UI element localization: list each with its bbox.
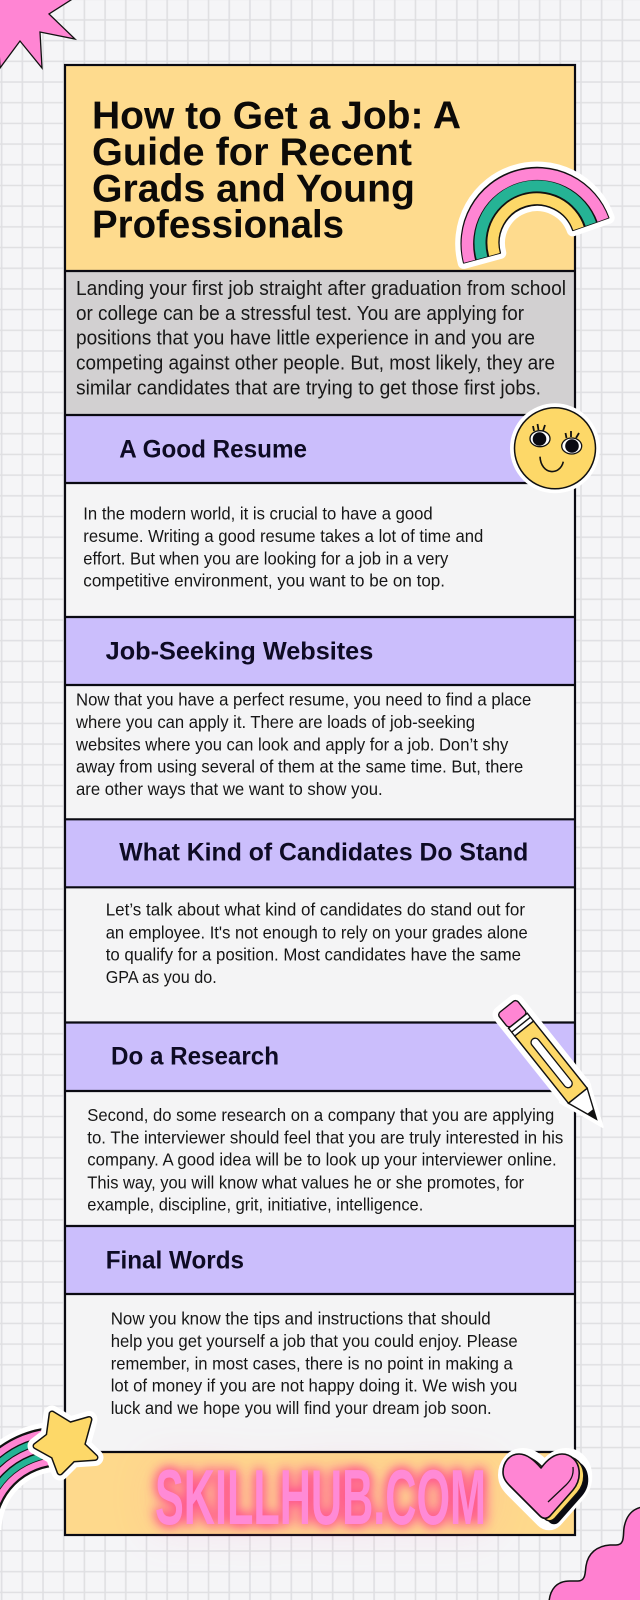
smile bbox=[540, 457, 563, 472]
right eye bbox=[562, 431, 582, 454]
text block: websites body: where you can apply it. There are loads of job-seeking bbox=[75, 712, 475, 732]
heading: a good resume: A Good Resume bbox=[119, 435, 307, 463]
heading: main title: How to Get a Job: A bbox=[92, 94, 461, 137]
heading: do a research: Do a Research bbox=[111, 1042, 279, 1070]
heading: main title bbox=[92, 94, 461, 246]
text block: introduction: competing against other people. But, most likely, they are bbox=[76, 352, 555, 374]
text block: candidates body bbox=[106, 900, 528, 987]
text block: resume body: In the modern world, it is crucial to have a good bbox=[83, 503, 433, 523]
text block: final words body: Now you know the tips and instructions that should bbox=[111, 1308, 491, 1328]
text block: candidates body: to qualify for a position. Most candidates have the same bbox=[106, 945, 521, 965]
text block: introduction: Landing your first job straight after graduation from school bbox=[76, 278, 566, 300]
text block: websites body: Now that you have a perfect resume, you need to find a place bbox=[76, 690, 531, 710]
text block: resume body bbox=[83, 503, 483, 591]
icon: shooting star with rainbow trail bbox=[0, 1414, 95, 1530]
text block: resume body: competitive environment, you want to be on top. bbox=[83, 571, 445, 591]
text block: resume body: resume. Writing a good resume takes a lot of time and bbox=[83, 526, 483, 546]
text block: candidates body: GPA as you do. bbox=[106, 967, 217, 987]
text block: websites body: websites where you can look and apply for a job. Don’t shy bbox=[75, 734, 508, 754]
text block: introduction: similar candidates that are trying to get those first jobs. bbox=[76, 377, 541, 399]
text block: final words body: remember, in most cases, there is no point in making a bbox=[111, 1353, 513, 1373]
panel: job-seeking websites bbox=[65, 617, 575, 819]
heading: what kind of candidates: What Kind of Candidates Do Stand bbox=[119, 839, 528, 867]
text block: research body: This way, you will know what values he or she promotes, for bbox=[87, 1172, 524, 1192]
text block: research body: example, discipline, grit, initiative, intelligence. bbox=[87, 1195, 423, 1215]
heading: job-seeking websites: Job-Seeking Websites bbox=[106, 637, 373, 665]
panel: footer background bbox=[65, 1452, 575, 1535]
text block: final words body: lot of money if you are not happy doing it. We wish you bbox=[111, 1376, 517, 1396]
text block: introduction bbox=[76, 278, 566, 399]
panel: what kind of candidates bbox=[65, 819, 575, 1023]
icon: rainbow sticker bbox=[461, 168, 609, 263]
panel: title bbox=[65, 65, 575, 271]
text block: resume body: effort. But when you are looking for a job in a very bbox=[83, 548, 448, 568]
panel: final words bbox=[65, 1226, 575, 1452]
text block: introduction: or college can be a stressful test. You are applying for bbox=[76, 303, 524, 325]
text block: research body: to. The interviewer should feel that you are truly interested in his bbox=[87, 1127, 563, 1147]
text block: introduction: positions that you have little experience in and you are bbox=[76, 328, 535, 350]
text block: candidates body: an employee. It's not enough to rely on your grades alone bbox=[106, 922, 528, 942]
panel frame and dividers bbox=[65, 65, 575, 1535]
icon: smiley sticker bbox=[510, 403, 600, 493]
heading: main title: Professionals bbox=[92, 204, 344, 246]
text block: websites body bbox=[75, 690, 531, 799]
heading: main title: Guide for Recent bbox=[92, 131, 412, 174]
text block: final words body bbox=[111, 1308, 518, 1418]
heading: main title: Grads and Young bbox=[92, 168, 415, 211]
text block: final words body: luck and we hope you will find your dream job soon. bbox=[111, 1398, 492, 1418]
left eye bbox=[530, 424, 550, 447]
decoration: pink wavy blob bottom right bbox=[549, 1507, 640, 1600]
panel: introduction bbox=[65, 271, 575, 415]
panel: a good resume bbox=[65, 415, 575, 617]
text block: websites body: are other ways that we want to show you. bbox=[76, 779, 383, 799]
heading: final words: Final Words bbox=[106, 1246, 244, 1274]
text block: websites body: away from using several of them at the same time. But, there bbox=[76, 757, 523, 777]
text block: research body bbox=[87, 1105, 563, 1215]
text block: research body: Second, do some research on a company that you are applying bbox=[87, 1105, 554, 1125]
icon: heart sticker bbox=[503, 1454, 588, 1524]
icon: pencil sticker bbox=[489, 991, 617, 1138]
text block: candidates body: Let’s talk about what kind of candidates do stand out for bbox=[106, 900, 525, 920]
decoration: pink starburst top left bbox=[0, 0, 75, 68]
panel: do a research bbox=[65, 1022, 575, 1226]
text block: research body: company. A good idea will be to look up your interviewer online. bbox=[87, 1150, 557, 1170]
text block: final words body: help you get yourself a job that you could enjoy. Please bbox=[111, 1331, 518, 1351]
